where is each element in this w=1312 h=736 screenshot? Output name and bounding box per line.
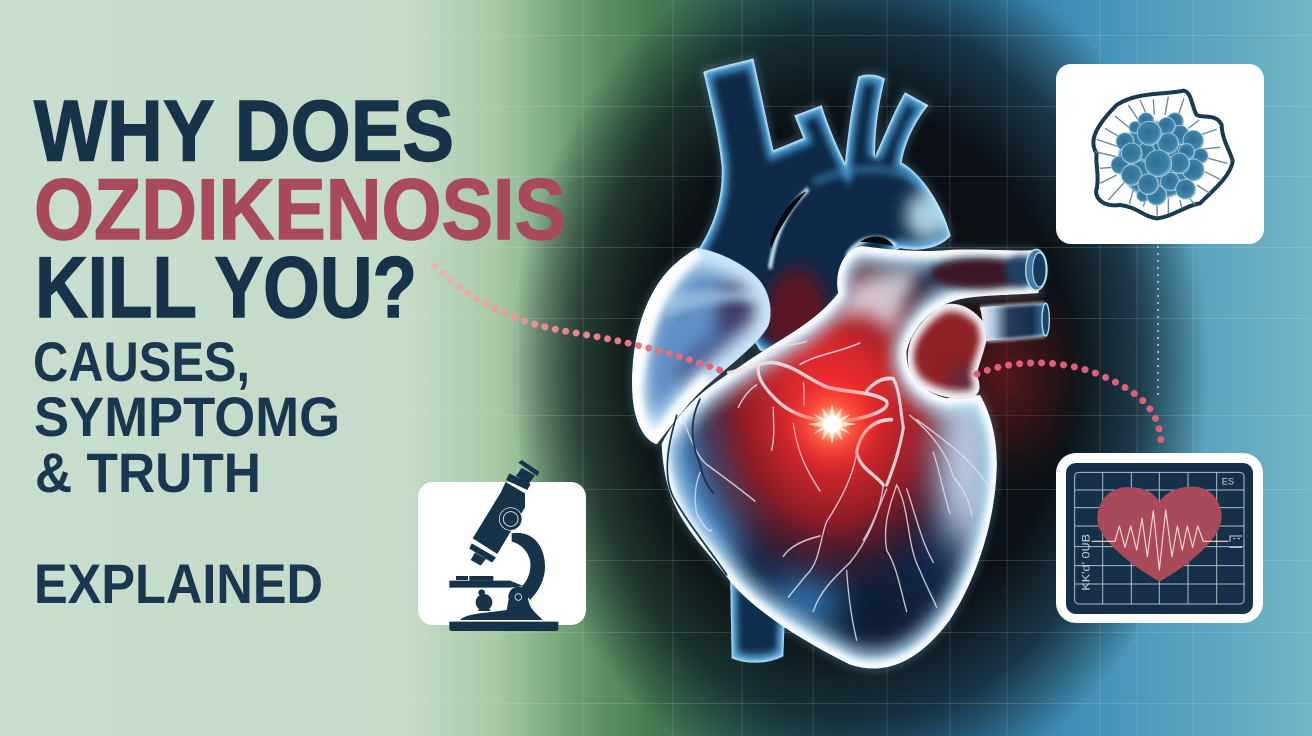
left atrium chamber (908, 304, 987, 399)
red heart (1097, 487, 1222, 582)
left dotted connector (435, 266, 728, 373)
lesion flare (784, 376, 880, 472)
secondary coronary branches (680, 341, 990, 640)
panel: cell card (1056, 64, 1264, 244)
monitor grid (1075, 472, 1244, 604)
subtitle line: truth: & TRUTH (35, 441, 261, 504)
cell membrane (1093, 91, 1233, 218)
icon: cell cluster (1093, 91, 1233, 218)
cell blobs (1111, 113, 1208, 205)
monitor readout right (1229, 536, 1242, 547)
title line: ozdikenosis: OZDIKENOSIS (34, 162, 566, 258)
icon: ECG heart monitor (1075, 472, 1244, 604)
monitor readout top: ES (1222, 477, 1234, 487)
red glow behind right of heart (925, 265, 1085, 485)
panel: ECG monitor card (1056, 453, 1263, 623)
heart illustration (632, 58, 1049, 693)
dark coronary branches on left edge (667, 399, 727, 575)
outer heart glow (632, 58, 1043, 668)
membrane spokes (1095, 97, 1227, 216)
subtitle line: explained: EXPLAINED (34, 552, 323, 615)
pulmonary artery tube opening (1026, 249, 1047, 290)
coronary arteries (667, 341, 990, 640)
subtitle line: causes: CAUSES, (33, 330, 250, 393)
vessel: inferior vena cava (730, 581, 784, 663)
icon: microscope (449, 460, 558, 631)
ECG trace (1092, 510, 1228, 570)
subtitle line: symptomg: SYMPTOMG (34, 385, 340, 448)
arch openings (770, 191, 893, 248)
title line: kill you: KILL YOU? (35, 240, 417, 336)
right atrium chamber (632, 248, 777, 444)
panel: microscope card (418, 460, 586, 631)
great vessels: vena cava, aortic arch and branches (697, 58, 952, 367)
monitor readout left: KK'd' 0UB (1080, 534, 1092, 591)
pulmonary vein tube (980, 303, 1049, 341)
ventricles and pulmonary artery (662, 246, 1039, 668)
title line: why does: WHY DOES (34, 84, 454, 180)
main coronary vessels (728, 362, 903, 485)
thin dotted link from cell card (1157, 246, 1159, 400)
right dotted connector (977, 363, 1161, 444)
